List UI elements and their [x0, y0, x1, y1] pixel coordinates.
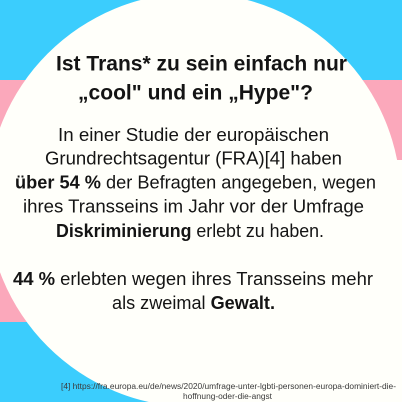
- title: „cool" und ein „Hype"?: [78, 80, 313, 104]
- title: [56, 52, 348, 104]
- text block: study finding on discrimination: Diskriminierung erlebt zu haben.: [56, 220, 324, 241]
- text block: study finding on discrimination: über 54 % der Befragten angegeben, wegen: [15, 172, 376, 192]
- footnote: source link: hoffnung-oder-die-angst: [183, 391, 273, 401]
- text block: study finding on discrimination: In einer Studie der europäischen: [58, 124, 329, 145]
- text block: violence statistic: als zweimal Gewalt.: [112, 292, 275, 313]
- text block: study finding on discrimination: [15, 124, 376, 241]
- footnote: source link: [61, 381, 396, 401]
- text block: study finding on discrimination: Grundrechtsagentur (FRA)[4] haben: [45, 148, 342, 168]
- text block: study finding on discrimination: ihres Transseins im Jahr vor der Umfrage: [23, 196, 364, 216]
- title: Ist Trans* zu sein einfach nur: [56, 52, 348, 76]
- text block: violence statistic: 44 % erlebten wegen ihres Transseins mehr: [13, 268, 373, 289]
- footnote: source link: [4] https://fra.europa.eu/de/news/2020/umfrage-unter-lgbti-personen-europa-dominiert-die-: [61, 381, 396, 391]
- text block: violence statistic: [13, 268, 373, 313]
